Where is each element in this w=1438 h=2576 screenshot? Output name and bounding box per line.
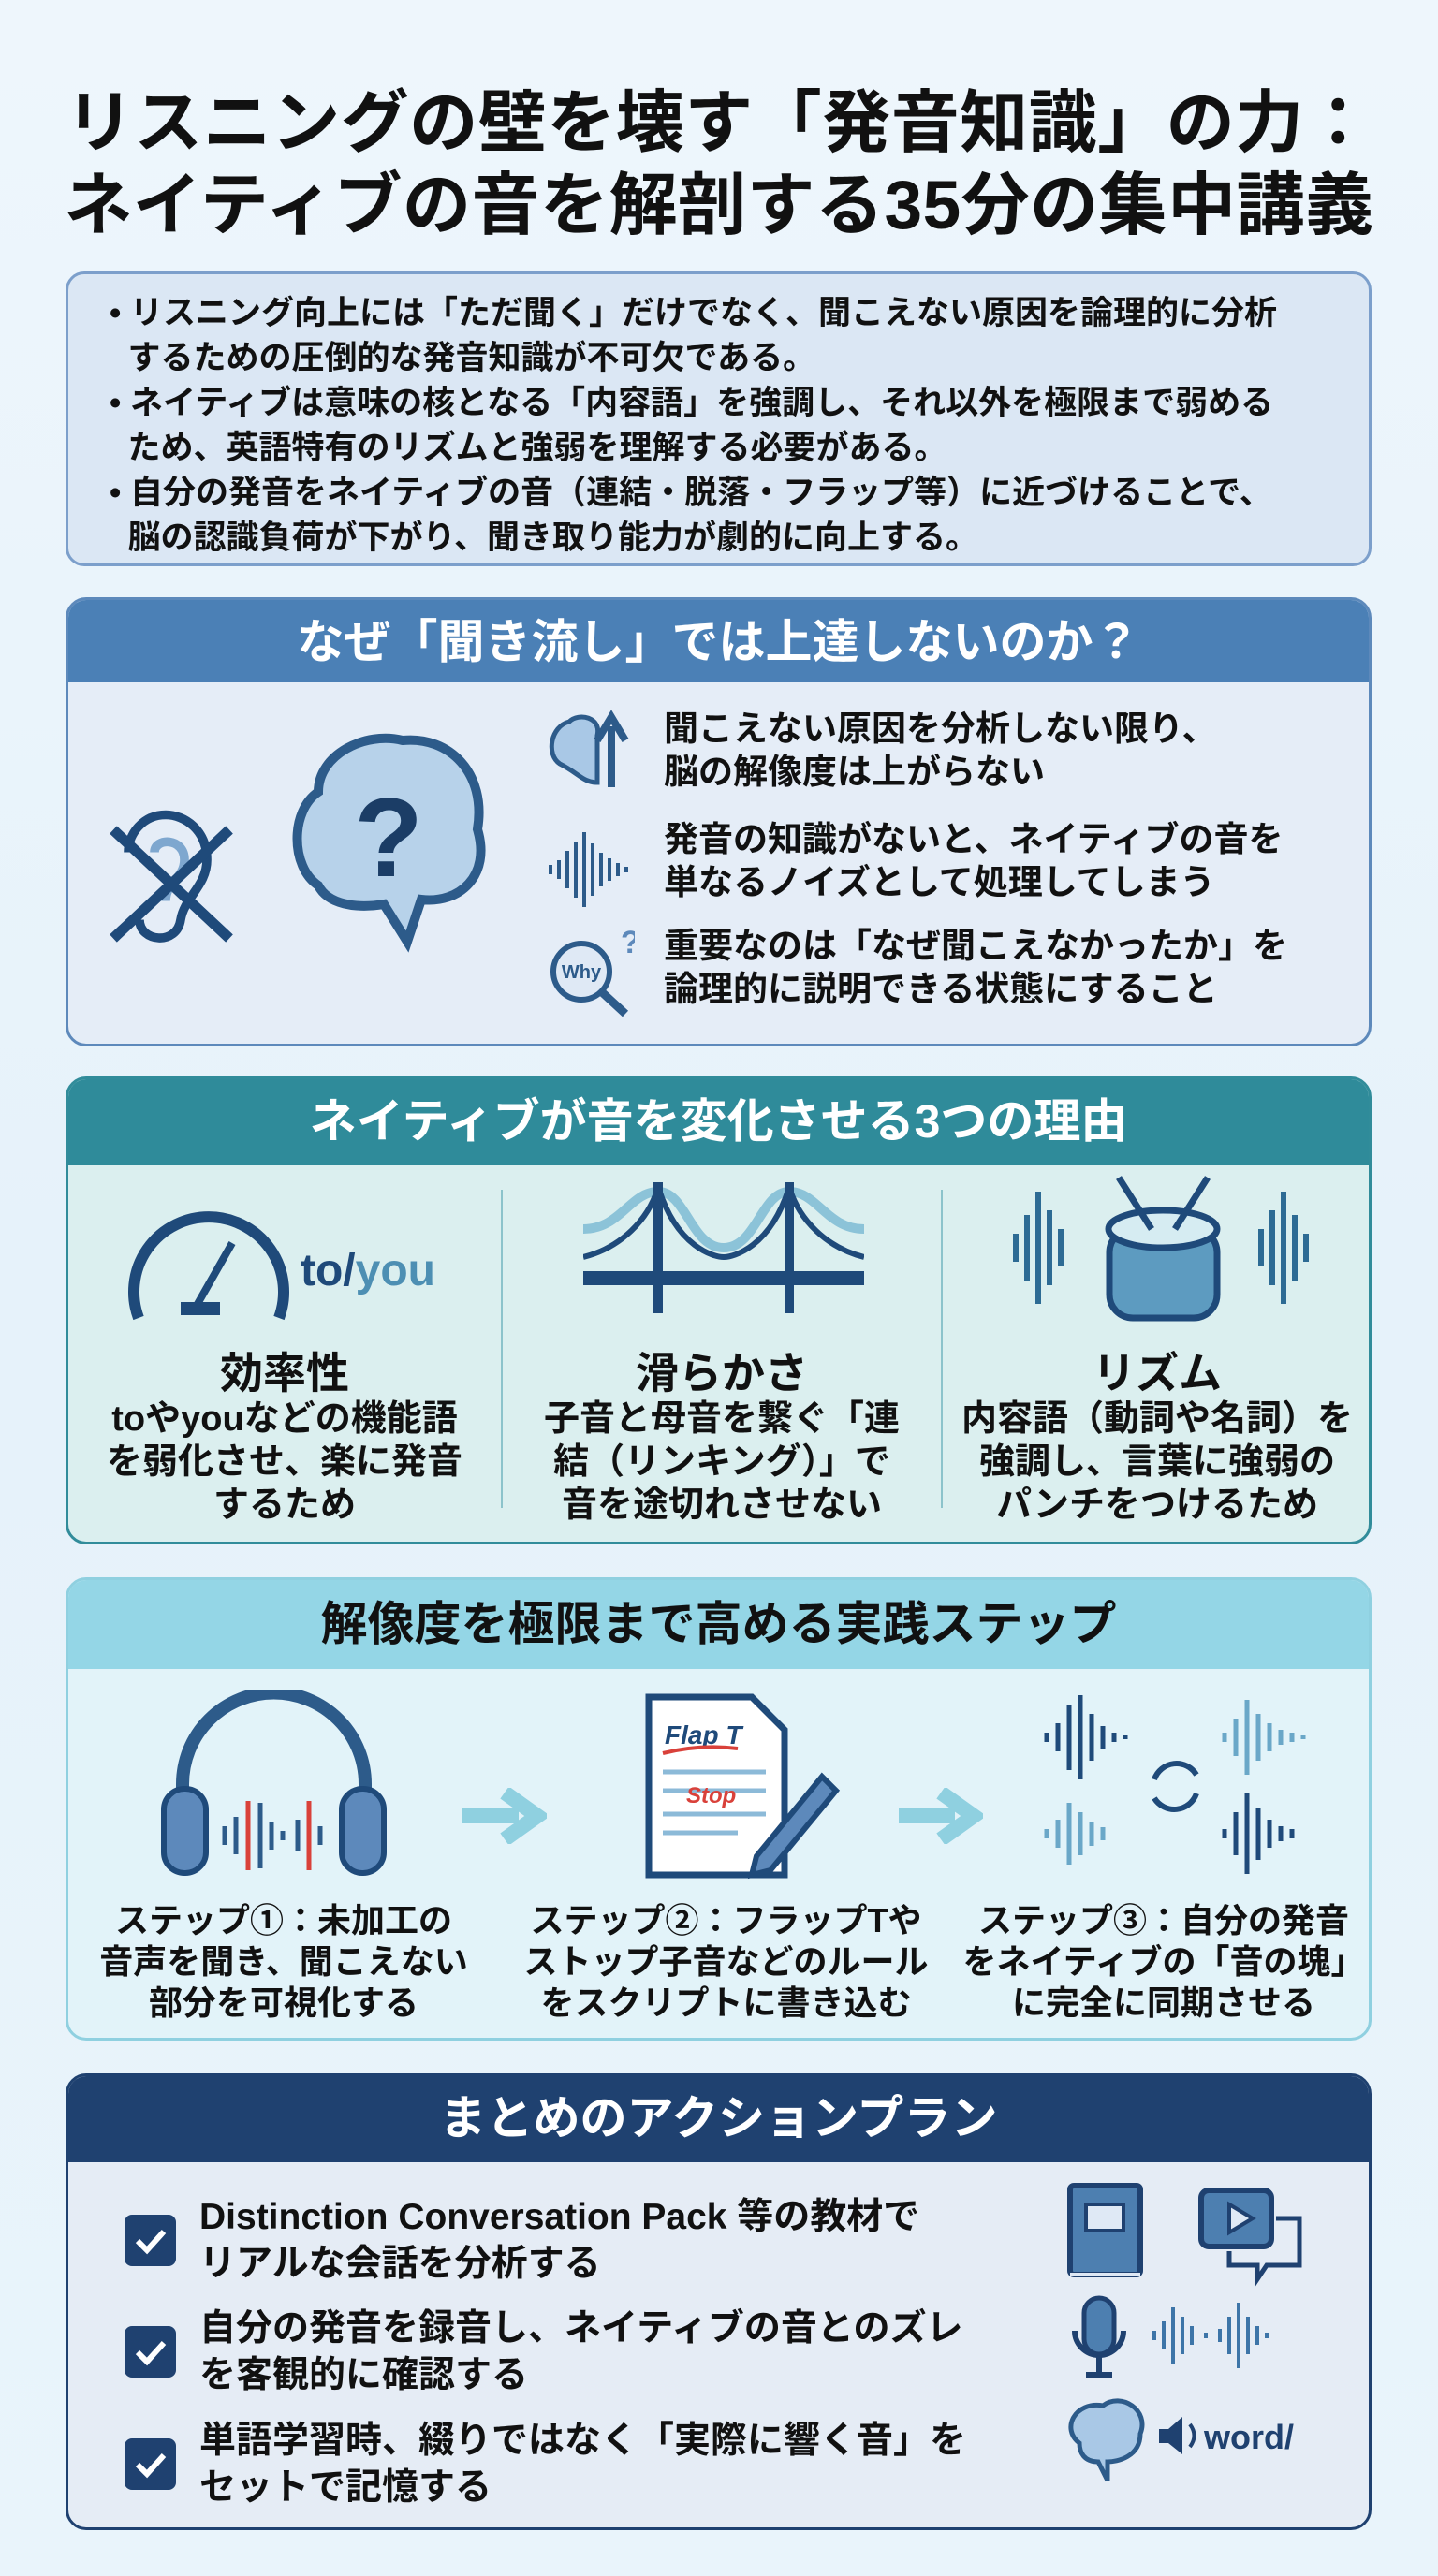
heading [68,1079,1369,1165]
step 3 text: ステップ③：自分の発音 [978,1901,1349,1939]
column text: パンチをつけるため [996,1486,1318,1525]
icon: why magnifier: Why [562,962,602,983]
column title: 効率性 [220,1349,349,1398]
action item 1: Distinction Conversation Pack 等の教材で [199,2197,919,2237]
panel: three reasons [66,1076,1372,1544]
column text [961,1399,1353,1525]
item 3: 論理的に説明できる状態にすること [664,970,1218,1008]
step 1 text: 音声を聞き、聞こえない [99,1942,468,1981]
summary text: ため、英語特有のリズムと強弱を理解する必要がある。 [127,430,946,466]
heading [68,1580,1369,1669]
column text: 内容語（動詞や名詞）を [961,1399,1353,1439]
icon: crossed ear [110,811,233,943]
step 1 text: ステップ①：未加工の [115,1901,452,1939]
step 1 text: 部分を可視化する [149,1983,418,2022]
icons: study tools [1067,2183,1301,2482]
column text: するため [213,1486,356,1525]
step 2 text: をスクリプトに書き込む [540,1983,912,2022]
action item 2: 自分の発音を録音し、ネイティブの音とのズレ [199,2308,962,2349]
column text: toやyouなどの機能語 [111,1399,458,1439]
action item 3 [125,2421,966,2508]
item 1: 脳の解像度は上がらない [664,753,1045,791]
title: リスニングの壁を壊す「発音知識」の力： [66,85,1372,161]
icon: script with pencil: Stop [686,1783,736,1808]
arrow [899,1788,983,1844]
item 2: 単なるノイズとして処理してしまう [664,863,1215,901]
panel: why passive listening fails [66,597,1372,1046]
step 2 text: ステップ②：フラップTや [530,1901,921,1939]
column title: リズム [1093,1349,1222,1398]
summary text: するための圧倒的な発音知識が不可欠である。 [127,340,815,376]
icon: brain with question [292,734,486,953]
column text: 結（リンキング）」で [553,1442,890,1482]
icon: brain up [549,710,629,787]
icon: drum with waves [1013,1176,1309,1322]
icon: syncing waveforms [1045,1695,1305,1874]
action item 3: セットで記憶する [199,2467,492,2508]
icon: bridge [583,1182,864,1313]
summary box [66,271,1372,566]
heading: 解像度を極限まで高める実践ステップ [320,1598,1116,1650]
step 1 text [99,1901,468,2022]
column: rhythm [961,1176,1353,1525]
title: ネイティブの音を解剖する35分の集中講義 [64,168,1374,243]
heading: なぜ「聞き流し」では上達しないのか？ [298,616,1140,668]
heading: ネイティブが音を変化させる3つの理由 [310,1095,1127,1148]
action item 3: 単語学習時、綴りではなく「実際に響く音」を [199,2421,966,2461]
icon: brain with question: ? [354,775,423,900]
step 3 text: をネイティブの「音の塊」 [962,1942,1365,1981]
column: efficiency [107,1211,462,1525]
icon: gauge and to/you: to/you [301,1246,435,1295]
icon: waveform [549,832,628,907]
column title: 滑らかさ [636,1349,808,1398]
column text: 音を途切れさせない [562,1486,882,1525]
column text: を弱化させ、楽に発音 [107,1442,462,1482]
panel: practice steps [66,1577,1372,2041]
item 1: 聞こえない原因を分析しない限り、 [664,710,1217,748]
summary text: • 自分の発音をネイティブの音（連結・脱落・フラップ等）に近づけることで、 [110,475,1272,511]
action item 1 [125,2197,919,2284]
arrow [462,1788,547,1844]
heading: まとめのアクションプラン [440,2092,998,2144]
icon: checkbox [125,2326,176,2378]
icon: script with pencil: Flap T [665,1720,744,1749]
item 1 [549,710,1217,791]
step 2 text: ストップ子音などのルール [523,1942,929,1981]
summary text [110,295,1277,556]
icon: headphones [161,1690,387,1876]
icons: study tools: word/ [1203,2418,1294,2456]
step 2 text [523,1901,929,2022]
icon: gauge and to/you [128,1211,435,1320]
step 3 text [962,1901,1365,2022]
column text [107,1399,462,1525]
icon: checkbox [125,2438,176,2490]
column text: 強調し、言葉に強弱の [979,1442,1335,1482]
step 3 text: に完全に同期させる [1012,1983,1315,2022]
action item 2: を客観的に確認する [199,2355,528,2395]
icon: checkbox [125,2215,176,2266]
heading [68,600,1369,682]
icon: script with pencil [646,1694,840,1880]
summary text: 脳の認識負荷が下がり、聞き取り能力が劇的に向上する。 [127,520,978,556]
action item 2 [125,2308,962,2395]
summary text: • ネイティブは意味の核となる「内容語」を強調し、それ以外を極限まで弱める [110,385,1273,421]
summary text: • リスニング向上には「ただ聞く」だけでなく、聞こえない原因を論理的に分析 [110,295,1277,331]
item 2 [549,820,1284,907]
icon: why magnifier [550,925,635,1017]
column: smoothness [544,1182,900,1525]
column text: 子音と母音を繋ぐ「連 [544,1399,900,1439]
item 2: 発音の知識がないと、ネイティブの音を [664,820,1284,858]
item 3: 重要なのは「なぜ聞こえなかったか」を [664,927,1287,965]
column text [544,1399,900,1525]
heading [68,2076,1369,2162]
title [64,85,1374,243]
action item 1: リアルな会話を分析する [199,2244,601,2284]
panel: action plan [66,2073,1372,2530]
item 3 [550,925,1287,1017]
